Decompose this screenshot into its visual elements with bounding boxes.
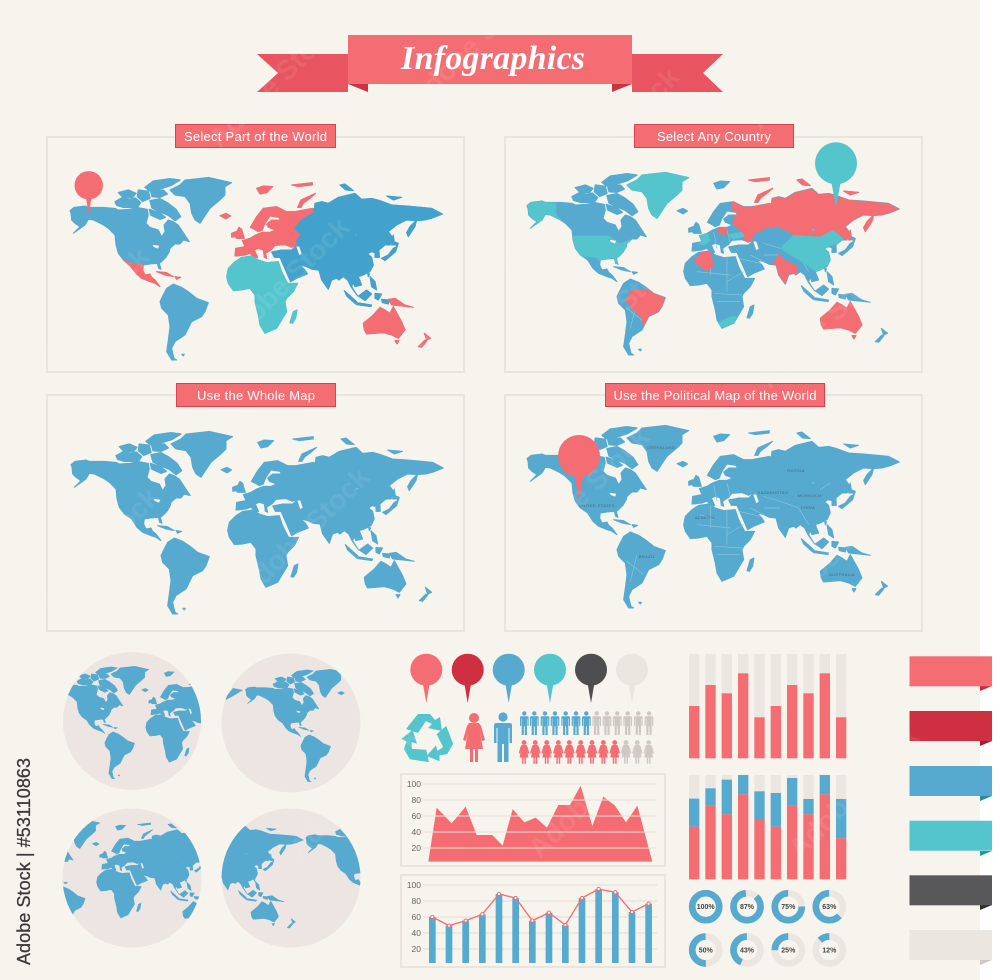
watermark: Adobe Stock — [782, 721, 926, 864]
watermark: Adobe Stock — [542, 241, 686, 384]
label: select any country: Select Any Country — [657, 129, 772, 144]
area chart axis labels: 20 — [412, 843, 421, 853]
area chart — [401, 774, 665, 866]
donut 87% — [728, 888, 766, 926]
pin: coral — [410, 654, 442, 703]
panel: select any country — [505, 124, 930, 372]
label: select part: Select Part of the World — [184, 129, 327, 144]
column chart: single series — [689, 654, 846, 758]
map: political — [527, 425, 899, 608]
donut 25%: 25% — [781, 948, 796, 954]
watermark: Adobe Stock — [212, 211, 356, 354]
bar and line chart — [401, 875, 665, 967]
ribbon: teal — [910, 821, 992, 856]
globe: eurasia and africa — [62, 808, 202, 948]
panel: political map — [505, 384, 922, 631]
bar chart axis labels: 60 — [412, 912, 421, 922]
label: political map — [606, 384, 824, 406]
country names: GREENLAND — [647, 445, 675, 450]
watermark: Adobe Stock — [762, 481, 906, 624]
ribbon: coral — [910, 656, 992, 691]
pin: red — [74, 171, 103, 215]
country names: ALGERIA — [695, 515, 715, 520]
bar chart axis labels — [407, 880, 421, 954]
donut 100% — [692, 893, 719, 920]
ribbon: light — [910, 930, 992, 965]
watermark: Adobe Stock — [542, 61, 686, 204]
watermark: Adobe Stock — [232, 461, 376, 604]
donut 100%: 100% — [697, 904, 715, 911]
donut 50%: 50% — [699, 948, 713, 954]
watermark: Adobe Stock — [202, 11, 346, 154]
donut 12% — [810, 931, 848, 969]
donut 75% — [775, 893, 802, 920]
pictogram: women row — [519, 740, 654, 764]
area chart axis labels: 80 — [412, 795, 421, 805]
globe: atlantic — [63, 652, 201, 790]
label: whole map — [176, 384, 336, 406]
country names: RUSSIA — [787, 468, 805, 473]
stock id text: Adobe Stock | #53110863 — [14, 758, 34, 965]
ribbon: crimson — [910, 711, 992, 746]
pins row — [410, 654, 648, 703]
icon: man — [494, 712, 512, 762]
map: regions highlighted — [70, 177, 442, 360]
panel: select part of the world — [47, 124, 464, 372]
map: countries highlighted — [524, 165, 930, 355]
watermark: Adobe Stock — [752, 251, 896, 394]
title ribbon — [257, 35, 723, 92]
icon: recycle — [398, 714, 459, 770]
country names: MONGOLIA — [798, 493, 822, 498]
donut 87%: 87% — [740, 904, 755, 911]
pin: blue — [493, 654, 525, 703]
pin: light — [616, 654, 648, 703]
donut 25% — [775, 936, 802, 964]
column chart: stacked — [689, 775, 846, 879]
watermark: Adobe Stock — [282, 721, 426, 864]
label: select part — [176, 124, 336, 148]
bar chart axis labels: 40 — [412, 928, 421, 938]
pictogram: men row — [520, 711, 653, 735]
country names: BRAZIL — [639, 554, 656, 559]
watermark: Adobe Stock — [382, 231, 526, 374]
watermark: Adobe Stock — [512, 421, 656, 564]
country names: UNITED STATES — [579, 503, 615, 508]
area chart axis labels: 40 — [412, 827, 421, 837]
icon: woman — [463, 713, 485, 762]
map: whole world — [71, 431, 443, 614]
title text: Infographics — [400, 40, 585, 77]
trend line — [431, 887, 650, 927]
label: select any country — [634, 124, 794, 148]
donut 75%: 75% — [781, 904, 796, 911]
area chart axis labels: 60 — [412, 811, 421, 821]
pin: charcoal — [575, 654, 607, 703]
globe: americas — [222, 654, 360, 792]
panel: use the whole map — [47, 384, 464, 631]
area chart axis labels — [407, 779, 421, 853]
label: political map: Use the Political Map of the World — [614, 388, 816, 403]
bar chart axis labels: 100 — [407, 880, 421, 890]
pin: teal — [815, 142, 857, 207]
bar chart axis labels: 20 — [412, 944, 421, 954]
label: whole map: Use the Whole Map — [197, 388, 315, 403]
country names: AUSTRALIA — [829, 572, 855, 577]
bar chart axis labels: 80 — [412, 896, 421, 906]
area chart axis labels: 100 — [407, 779, 421, 789]
ribbon: charcoal — [910, 875, 992, 910]
donut 43% — [729, 932, 765, 968]
bars — [429, 889, 652, 963]
donut charts — [692, 888, 848, 969]
pin: teal small — [534, 654, 566, 703]
donut 12%: 12% — [822, 948, 837, 954]
donut 50% — [692, 936, 719, 964]
donut 63% — [810, 888, 848, 926]
white margin strip — [980, 0, 1000, 980]
watermark: Adobe Stock — [522, 721, 666, 864]
watermark: Adobe Stock — [22, 481, 166, 624]
country names: CHINA — [801, 505, 815, 510]
globe: pacific — [222, 808, 360, 948]
country names — [579, 445, 855, 577]
ribbon: blue — [910, 766, 992, 801]
donut 63%: 63% — [822, 904, 837, 911]
pin: large red — [558, 435, 600, 500]
pin: crimson — [452, 654, 484, 703]
watermark: Adobe Stock — [12, 241, 156, 384]
country names: KAZAKHSTAN — [758, 490, 788, 495]
donut 43%: 43% — [740, 948, 755, 954]
